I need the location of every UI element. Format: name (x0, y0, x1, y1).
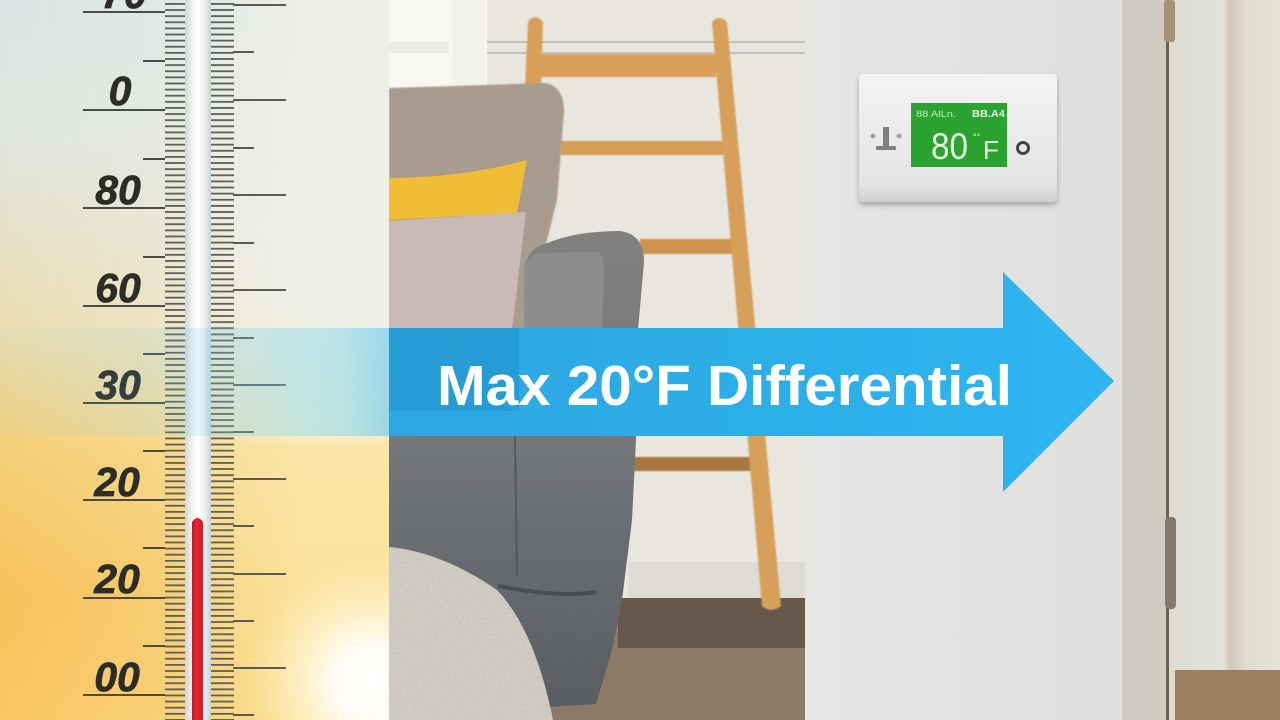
lower hinge (1165, 517, 1176, 609)
scale numbers: 30 (95, 362, 141, 408)
door gap (1166, 0, 1169, 720)
skirting board (628, 562, 805, 599)
thermometer (83, 0, 286, 720)
scale numbers: 80 (95, 167, 141, 213)
yellow cushion (389, 160, 527, 220)
glass tube (185, 0, 211, 720)
thermostat body (859, 74, 1057, 202)
temperature reading: 80 (931, 126, 968, 167)
arrow band over thermometer (0, 328, 389, 436)
arm front face (524, 252, 604, 330)
icon: temperature sensor (870, 127, 902, 150)
rung 4 (630, 457, 752, 471)
right minor ticks (211, 0, 234, 720)
unit: F (983, 135, 999, 165)
scale numbers: 60 (95, 265, 141, 311)
gray sofa body (389, 231, 644, 708)
mercury column (192, 518, 203, 720)
baseboard (1175, 670, 1280, 720)
door (1168, 0, 1280, 720)
blanket (389, 547, 553, 720)
scale numbers: 00 (94, 654, 140, 700)
right major ticks (233, 5, 286, 715)
wall moulding (389, 40, 805, 54)
panel: right wall (805, 0, 1280, 720)
pink cushion (389, 212, 526, 335)
sofa (389, 83, 644, 720)
thermostat (859, 74, 1057, 202)
panel: room background (389, 0, 805, 720)
rung 2 (560, 141, 724, 155)
floor (545, 598, 805, 720)
icon: dial (1018, 142, 1028, 154)
left minor ticks (165, 0, 185, 720)
right rail (712, 18, 781, 610)
scale numbers (93, 0, 147, 700)
pilaster (452, 0, 485, 84)
sun glow (247, 557, 389, 720)
display screen (911, 103, 1007, 167)
white door frame (389, 0, 487, 90)
scale numbers: 20 (93, 556, 140, 602)
cushion reflection (389, 328, 519, 411)
scale numbers: 20 (93, 459, 140, 505)
rung 3 (640, 239, 732, 254)
status text: 88 AlLn. (916, 109, 956, 119)
arm seam (515, 436, 517, 575)
taupe backrest (389, 83, 564, 330)
arrow: max differential (389, 272, 1114, 492)
seat ledge (498, 586, 596, 594)
arrow label: Max 20°F Differential (437, 354, 1012, 418)
scale numbers: 0 (109, 68, 132, 114)
panel: thermometer backdrop (0, 0, 389, 720)
clock text: BB.A4 (972, 109, 1005, 120)
upper hinge (1164, 0, 1175, 42)
ladder (525, 17, 781, 610)
door frame (1122, 0, 1168, 720)
left rail (525, 17, 543, 86)
left major ticks (83, 12, 165, 695)
rung 1 (538, 54, 716, 77)
degree mark: °° (973, 132, 981, 142)
